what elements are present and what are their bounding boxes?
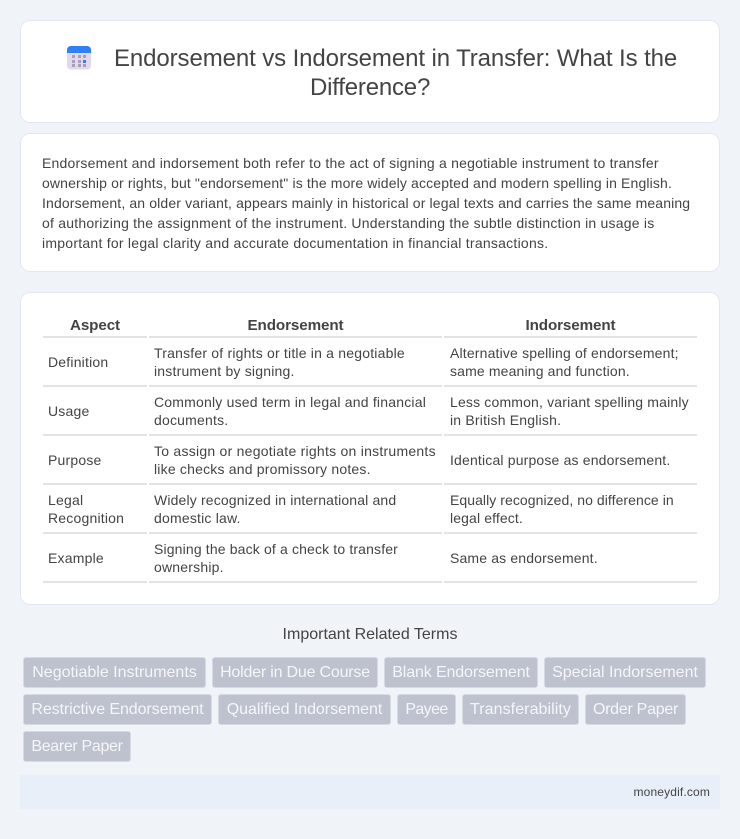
tag xyxy=(23,731,131,762)
row: purpose xyxy=(48,443,670,477)
intro paragraph: Endorsement and indorsement both refer to the act of signing a negotiable instrument to transfer xyxy=(42,155,659,171)
row: example: Same as endorsement. xyxy=(450,550,598,566)
row: usage xyxy=(48,394,689,428)
footer credit: moneydif.com xyxy=(634,785,710,799)
tag list xyxy=(23,657,706,762)
row: legal recognition: domestic law. xyxy=(154,510,241,526)
row: legal recognition: legal effect. xyxy=(450,510,523,526)
tag: Qualified Indorsement xyxy=(227,701,382,718)
tag: Negotiable Instruments xyxy=(32,664,197,681)
row: usage: in British English. xyxy=(450,412,561,428)
row: legal recognition: Widely recognized in international and xyxy=(154,492,396,508)
footer bar xyxy=(20,775,720,809)
tag xyxy=(462,694,579,725)
tag xyxy=(23,657,206,688)
panel: title card xyxy=(20,20,720,123)
tag xyxy=(384,657,538,688)
intro paragraph: ownership or rights, but "endorsement" is the more widely accepted and modern spelling in English. xyxy=(42,175,672,191)
tag xyxy=(544,657,706,688)
heading: important related terms: Important Related Terms xyxy=(283,626,457,643)
intro paragraph: of authorizing the assignment of the instrument. Understanding the subtle distinction in usage is xyxy=(42,215,654,231)
row: usage: Less common, variant spelling mainly xyxy=(450,394,689,410)
title: Difference? xyxy=(310,74,430,101)
row: legal recognition: Recognition xyxy=(48,510,124,526)
row: definition: same meaning and function. xyxy=(450,363,630,379)
title: Endorsement vs Indorsement in Transfer: What Is the xyxy=(114,45,677,72)
icon: calendar xyxy=(67,46,91,70)
row: definition: Transfer of rights or title in a negotiable xyxy=(154,345,405,361)
row: definition: instrument by signing. xyxy=(154,363,295,379)
tag: Bearer Paper xyxy=(31,738,123,755)
row: legal recognition: Equally recognized, no difference in xyxy=(450,492,674,508)
row: example: ownership. xyxy=(154,559,224,575)
title xyxy=(114,45,677,101)
intro paragraph: Indorsement, an older variant, appears mainly in historical or legal texts and carries the same meaning xyxy=(42,195,690,211)
row: definition: Alternative spelling of endorsement; xyxy=(450,345,679,361)
row: legal recognition xyxy=(48,492,674,526)
tag xyxy=(397,694,456,725)
intro paragraph: important for legal clarity and accurate documentation in financial transactions. xyxy=(42,235,548,251)
row: purpose: Purpose xyxy=(48,452,102,468)
row: purpose: To assign or negotiate rights on instruments xyxy=(154,443,436,459)
row: usage: Commonly used term in legal and financial xyxy=(154,394,426,410)
header row xyxy=(70,317,616,334)
tag: Transferability xyxy=(470,701,571,718)
tag xyxy=(212,657,378,688)
tag xyxy=(23,694,212,725)
panel: intro card xyxy=(20,133,720,272)
row: purpose: Identical purpose as endorsement. xyxy=(450,452,670,468)
tag: Special Indorsement xyxy=(552,664,698,681)
panel: comparison table card xyxy=(20,292,720,605)
tag xyxy=(585,694,686,725)
row: usage: Usage xyxy=(48,403,89,419)
row: example xyxy=(48,541,598,575)
row: legal recognition: Legal xyxy=(48,492,83,508)
intro paragraph xyxy=(42,155,690,251)
header row: Endorsement xyxy=(248,317,343,334)
header row: Aspect xyxy=(70,317,120,334)
row: definition xyxy=(48,345,679,379)
row: example: Signing the back of a check to transfer xyxy=(154,541,398,557)
row: purpose: like checks and promissory notes. xyxy=(154,461,371,477)
tag xyxy=(218,694,391,725)
tag: Blank Endorsement xyxy=(392,664,530,681)
header row: Indorsement xyxy=(525,317,616,334)
comparison table xyxy=(43,317,697,583)
tag: Payee xyxy=(405,701,448,718)
tag: Holder in Due Course xyxy=(220,664,370,681)
tag: Restrictive Endorsement xyxy=(31,701,204,718)
row: usage: documents. xyxy=(154,412,228,428)
row: definition: Definition xyxy=(48,354,108,370)
row: example: Example xyxy=(48,550,104,566)
tag: Order Paper xyxy=(593,701,678,718)
